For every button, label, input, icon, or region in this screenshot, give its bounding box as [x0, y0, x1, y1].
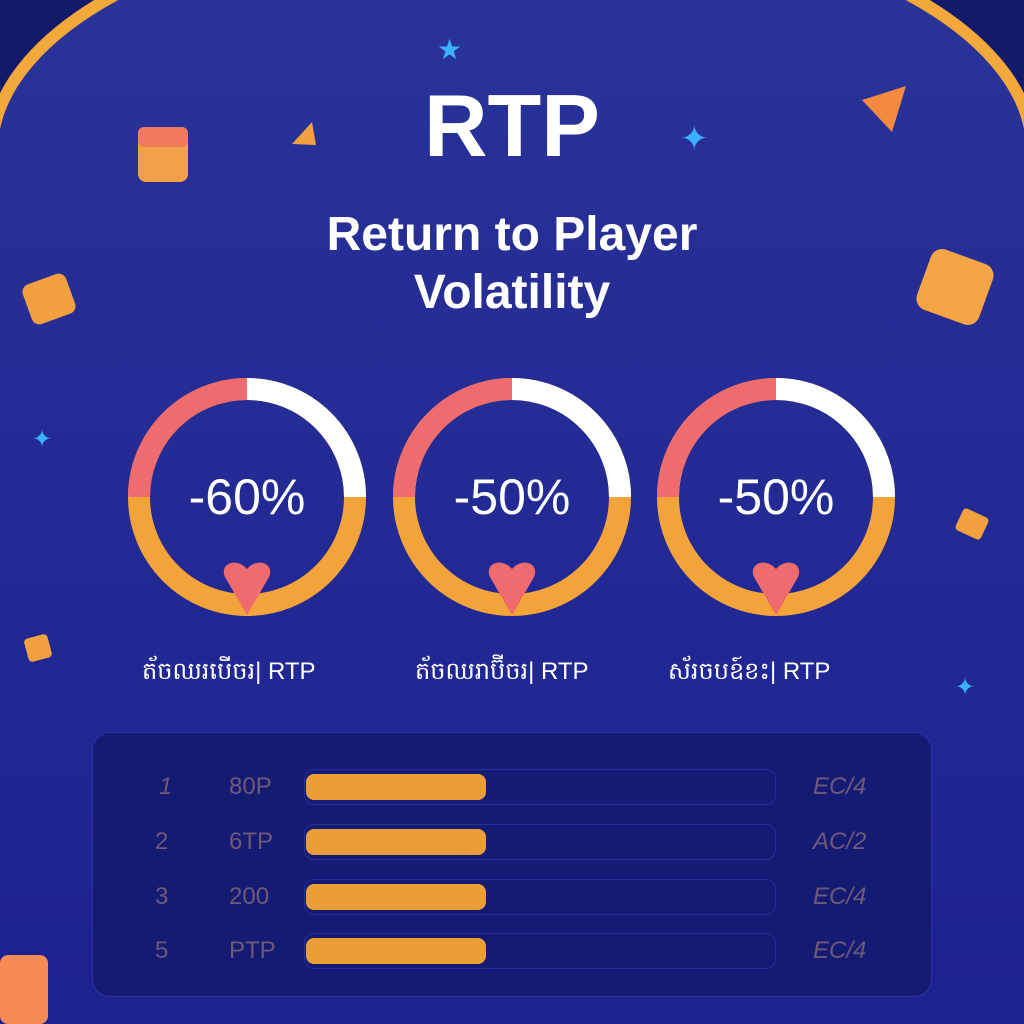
gauge labels: ត័ចឈរបើចរ| RTP	[142, 658, 316, 685]
row 2	[155, 824, 866, 860]
row 3: 3	[155, 883, 168, 910]
decorative cubes: ✦	[680, 120, 708, 158]
row 4: PTP	[229, 937, 276, 964]
gauge 3	[668, 389, 884, 615]
gauge labels: ស័រចបឧ៍ខះ| RTP	[668, 658, 830, 685]
gauge 2	[404, 389, 620, 615]
row 4: 5	[155, 937, 168, 964]
row 4: EC/4	[813, 937, 866, 964]
row 1: EC/4	[813, 773, 866, 800]
row 2: 6TP	[229, 828, 273, 855]
title: RTP	[424, 76, 600, 175]
gauge 1	[139, 389, 355, 615]
decorative cubes: ✦	[955, 674, 975, 701]
table panel	[92, 732, 932, 997]
gauge labels	[142, 654, 830, 685]
row 2: AC/2	[813, 828, 866, 855]
row 1	[159, 769, 866, 805]
row 2: 2	[155, 828, 168, 855]
gauges	[128, 378, 895, 616]
row 3: 200	[229, 883, 269, 910]
row 3: EC/4	[813, 883, 866, 910]
gauge 2: -50%	[454, 469, 570, 525]
subtitle: Volatility	[414, 266, 610, 319]
row 3	[155, 879, 866, 915]
row 1: 1	[159, 773, 172, 800]
row 1: 80P	[229, 773, 272, 800]
subtitle	[327, 208, 697, 319]
subtitle: Return to Player	[327, 208, 697, 261]
gauge 3: -50%	[718, 469, 834, 525]
gauge 1: -60%	[189, 469, 305, 525]
row 4	[155, 933, 866, 969]
gauge labels: ត័ចឈរាប៊ីចរ| RTP	[415, 658, 589, 685]
decorative cubes: ✦	[32, 426, 52, 453]
decorative cubes: ★	[437, 34, 462, 65]
